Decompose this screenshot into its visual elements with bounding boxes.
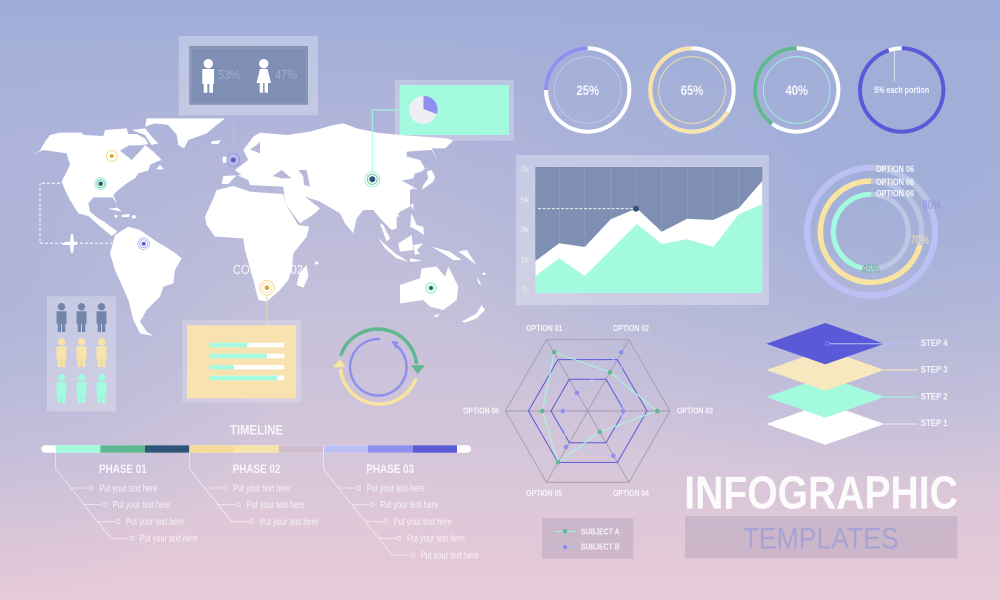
subtitle band (685, 516, 957, 558)
phase 02: Put your text here (247, 500, 305, 511)
axis labels: 3k (520, 226, 530, 234)
layered steps: STEP 1 (921, 418, 948, 429)
radar labels: OPTION 04 (613, 488, 649, 498)
phase 03: Put your text here (380, 500, 439, 511)
marker: australia (426, 282, 436, 294)
panel: pie callout (395, 80, 514, 141)
donut: 40% (755, 48, 838, 132)
phase 02: PHASE 02 (233, 462, 281, 476)
icon: female (256, 59, 271, 93)
timeline bar (41, 445, 471, 453)
radial progress chart: OPTION 06 (876, 164, 914, 174)
axis labels: 7k (520, 166, 530, 174)
text: country label behind map: COUNTRY 02 (233, 262, 303, 277)
title: INFOGRAPHIC (684, 466, 958, 518)
phase 02: Put your text here (233, 484, 291, 494)
axis labels: 5k (520, 196, 530, 204)
marker: usa (95, 178, 107, 190)
donut: 25%: 25% (576, 82, 599, 98)
axis labels (520, 166, 530, 294)
phase 03: Put your text here (394, 517, 452, 528)
highlighted point (538, 206, 639, 212)
radar labels (463, 323, 713, 498)
world map (33, 118, 485, 336)
radar labels: OPTION 03 (677, 406, 713, 416)
marker: south america (138, 238, 150, 250)
phase 03: PHASE 03 (366, 462, 414, 476)
marker: asia (365, 172, 380, 187)
layered steps (766, 323, 948, 445)
panel: gender split (179, 36, 318, 115)
teal area series (535, 204, 762, 293)
icon: male (202, 59, 214, 93)
phase 03: Put your text here (421, 550, 479, 562)
heading: timeline: TIMELINE (230, 422, 283, 438)
radial progress chart: OPTION 06 (876, 177, 914, 187)
phase 01: Put your text here (113, 500, 171, 511)
radar labels: OPTION 06 (463, 406, 499, 416)
phase 03: Put your text here (367, 484, 425, 494)
subject B series (560, 350, 625, 458)
legend: SUBJECT B (581, 542, 620, 552)
text: female share: 47% (275, 68, 297, 82)
eurasia (222, 123, 453, 233)
panel: people pictogram (47, 296, 116, 411)
phase 02 (189, 453, 318, 528)
donut: 40%: 40% (786, 82, 808, 98)
phase 02: Put your text here (260, 517, 318, 528)
donut: 65% (650, 48, 734, 132)
marker: canada (106, 150, 117, 162)
marker: uk (227, 154, 240, 166)
subtitle band: TEMPLATES (743, 522, 899, 555)
radial progress chart: 45% (862, 262, 880, 276)
axis labels: 0 (522, 286, 527, 294)
donut: 5% each portion: 5% each portion (874, 85, 929, 95)
radar labels: OPTION 05 (526, 488, 563, 498)
marker: south africa (260, 280, 274, 295)
phase 03 (323, 453, 479, 562)
phase 03: Put your text here (407, 534, 465, 545)
cycle arrows (333, 329, 425, 404)
legend (542, 518, 633, 559)
donut: 65%: 65% (681, 82, 704, 98)
donut: 25% (546, 48, 629, 132)
phase 01 (56, 453, 198, 545)
text: male share: 53% (218, 68, 240, 82)
axis labels: 1k (520, 256, 530, 264)
radial progress chart: OPTION 06 (876, 188, 914, 198)
connector: gender panel to UK marker (232, 115, 234, 160)
connector: pie panel to Asia marker (372, 110, 400, 179)
legend: SUBJECT A (581, 526, 620, 536)
white area series (535, 181, 762, 293)
layered steps: STEP 4 (921, 338, 948, 349)
icon: plane (63, 234, 77, 253)
radial progress chart (807, 164, 941, 296)
radar labels: OPTION 01 (526, 323, 563, 333)
phase 01: Put your text here (99, 484, 158, 494)
panel: progress bars (182, 320, 301, 403)
africa (205, 186, 309, 302)
radial progress chart: 70% (911, 233, 929, 247)
phase 01: Put your text here (140, 534, 198, 545)
radar chart (463, 323, 713, 498)
donut: 5% each portion (860, 48, 943, 132)
phase 01: Put your text here (126, 517, 184, 528)
radar labels: OPTION 02 (613, 323, 649, 333)
phase 01: PHASE 01 (99, 462, 147, 476)
layered steps: STEP 3 (921, 365, 948, 376)
panel: area chart (516, 155, 769, 305)
layered steps: STEP 2 (921, 391, 948, 402)
pie chart (409, 96, 438, 124)
subject A series (540, 350, 660, 465)
flight route with plane (40, 183, 112, 253)
connector: yellow panel to Africa marker (266, 295, 268, 325)
radial progress chart: 80% (923, 198, 941, 212)
south america (110, 227, 182, 336)
